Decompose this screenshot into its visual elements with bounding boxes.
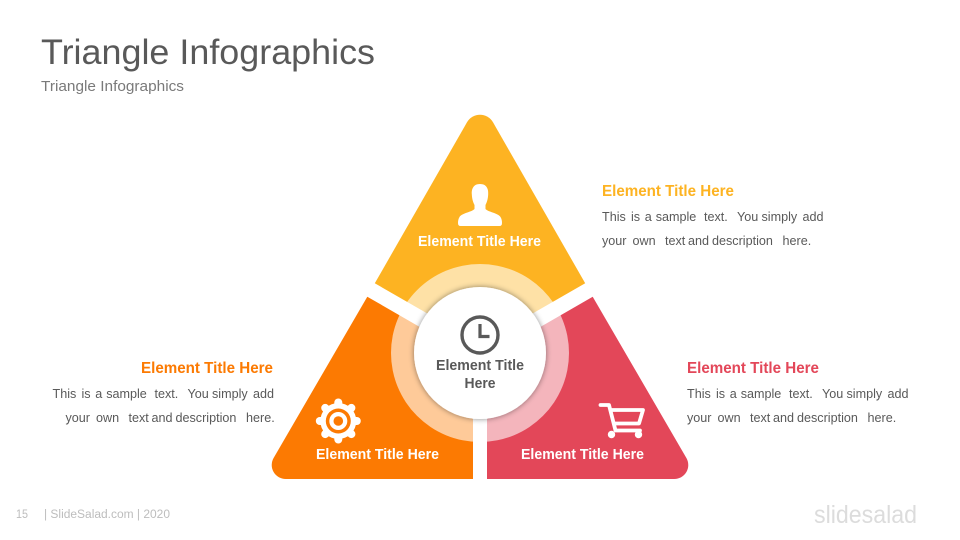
text block: top right: add <box>802 210 824 224</box>
text block: right <box>687 360 909 425</box>
text block: top right: text <box>665 234 686 248</box>
centre label: Here <box>464 375 496 392</box>
icon: clock <box>462 317 498 353</box>
text block: right: You <box>822 387 843 401</box>
text block: left: sample <box>106 387 147 401</box>
triangle diagram <box>272 115 688 479</box>
text block: left: text. <box>154 387 178 401</box>
centre label: Element Title <box>436 357 524 374</box>
panel: right triangle segment <box>487 297 688 479</box>
text block: top right: Element Title Here <box>602 183 734 200</box>
centre circle <box>414 287 546 419</box>
text block: right: This <box>687 387 711 401</box>
text block: left: and <box>152 411 173 425</box>
text block: top right: This <box>602 210 626 224</box>
text block: top right: simply <box>762 210 798 224</box>
text block: left: Element Title Here <box>141 360 273 377</box>
text block: left: a <box>95 387 102 401</box>
text block: right: simply <box>846 387 883 401</box>
text block: right: Element Title Here <box>687 360 819 377</box>
text block: top right: your <box>602 234 626 248</box>
top segment label: Element Title Here <box>418 234 541 250</box>
text block: right: description <box>797 411 858 425</box>
text block: top right: text. <box>704 210 728 224</box>
text block: left: This <box>52 387 76 401</box>
text block: top right: You <box>737 210 758 224</box>
subtitle: Triangle Infographics <box>41 79 184 95</box>
left segment label: Element Title Here <box>316 447 439 463</box>
text block: top right <box>602 183 824 248</box>
text block: left: description <box>176 411 236 425</box>
text block: top right: here. <box>782 234 811 248</box>
text block: right: text. <box>789 387 813 401</box>
icon: person <box>458 184 502 226</box>
text block: right: is <box>716 387 725 401</box>
text block: right: and <box>773 411 794 425</box>
translucent ring <box>391 264 569 442</box>
panel: left triangle segment <box>272 297 473 479</box>
footer logo: slidesalad <box>814 501 917 529</box>
text block: left: You <box>188 387 209 401</box>
text block: left: your <box>66 411 90 425</box>
text block: right: sample <box>741 387 781 401</box>
text block: left: simply <box>212 387 248 401</box>
text block: top right: own <box>632 234 656 248</box>
text block: right: text <box>750 411 771 425</box>
text block: top right: is <box>631 210 640 224</box>
icon: gear <box>320 402 357 440</box>
centre label <box>436 357 524 392</box>
text block: left <box>52 360 275 425</box>
title: Triangle Infographics <box>41 33 375 72</box>
text block: top right: a <box>645 210 652 224</box>
icon: shopping cart <box>600 405 643 436</box>
panel: top triangle segment <box>375 115 585 344</box>
text block: left: here. <box>246 411 275 425</box>
right segment label: Element Title Here <box>521 447 644 463</box>
text block: left: add <box>253 387 274 401</box>
footer page number: 15 <box>16 509 28 521</box>
text block: right: here. <box>868 411 896 425</box>
text block: left: own <box>96 411 119 425</box>
text block: right: own <box>718 411 741 425</box>
text block: top right: description <box>712 234 773 248</box>
text block: right: a <box>730 387 737 401</box>
text block: left: is <box>82 387 91 401</box>
text block: left: text <box>128 411 149 425</box>
text block: top right: and <box>688 234 709 248</box>
text block: top right: sample <box>656 210 696 224</box>
text block: right: your <box>687 411 712 425</box>
text block: right: add <box>888 387 909 401</box>
footer source: | SlideSalad.com | 2020 <box>44 509 170 521</box>
